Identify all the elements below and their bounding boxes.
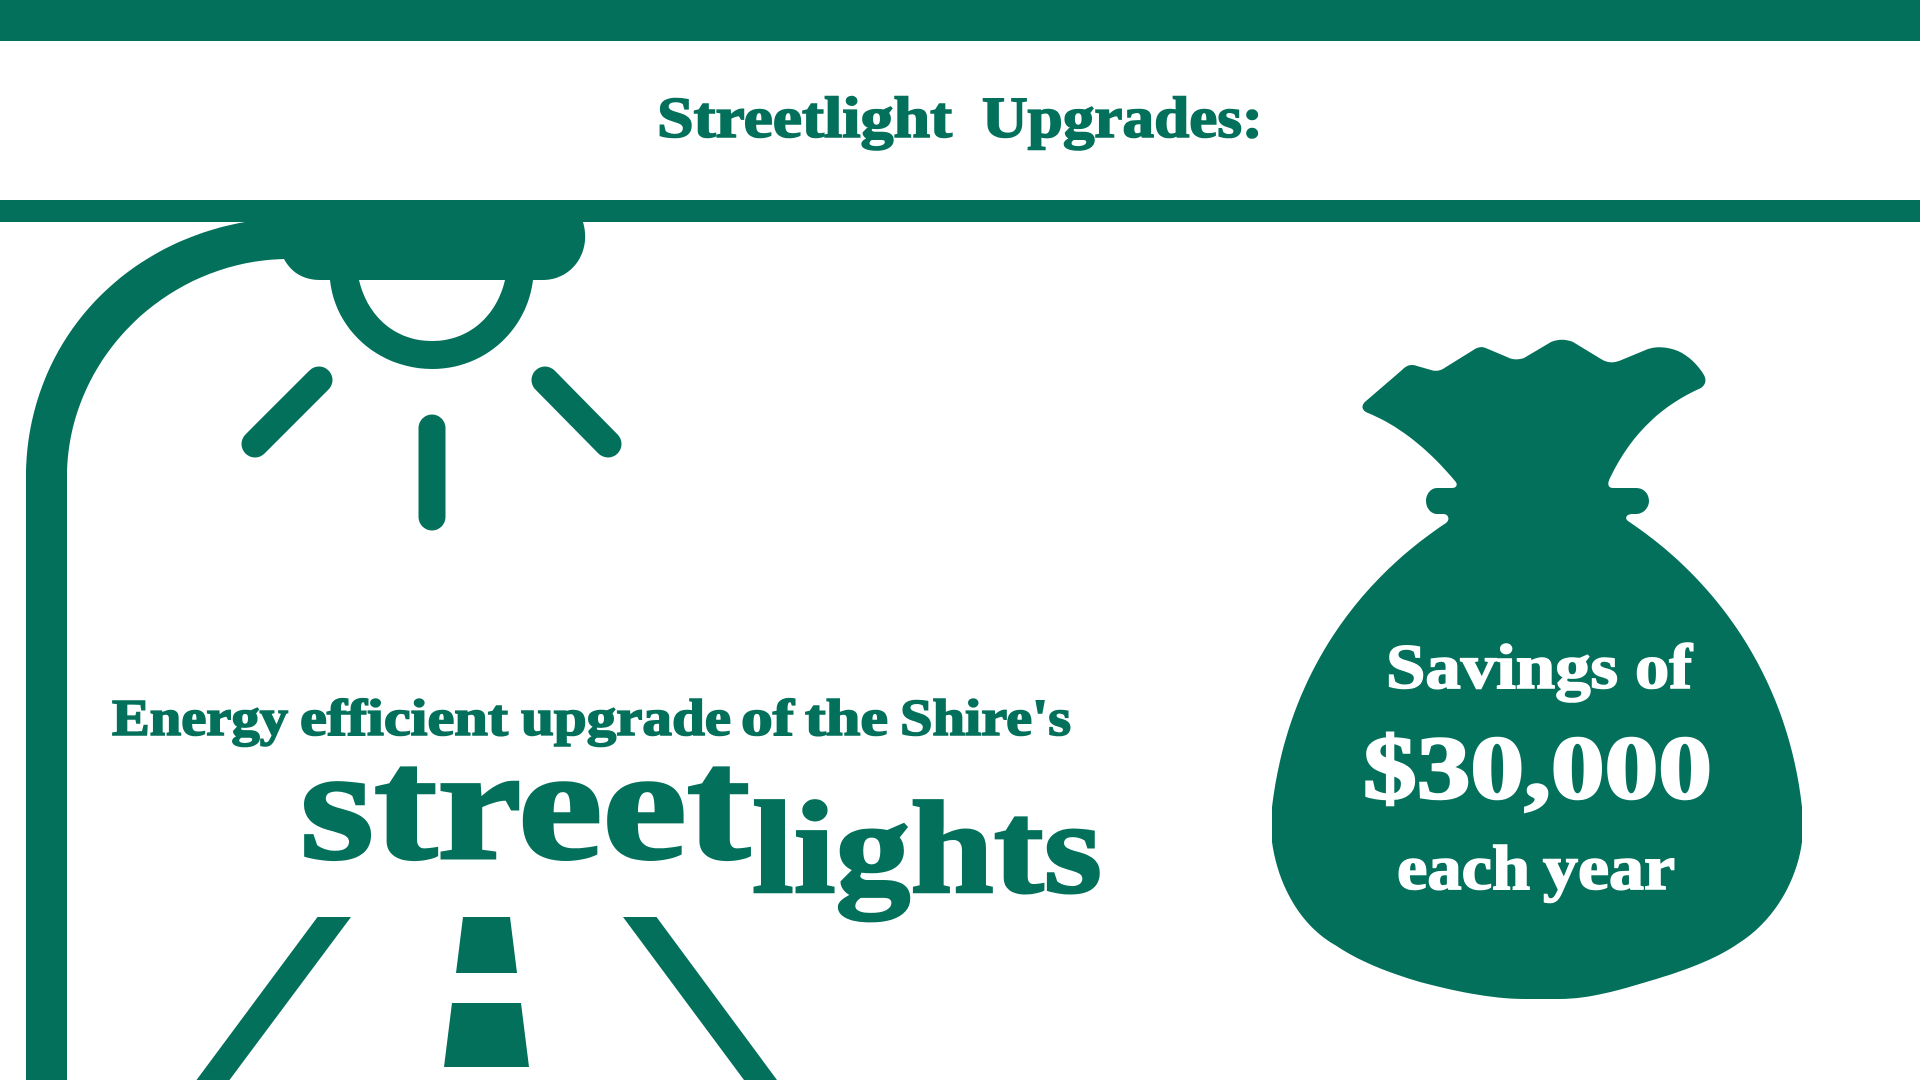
text: energy efficient upgrade (112, 690, 1071, 747)
text: each year: year (1543, 832, 1675, 903)
light rays (255, 380, 608, 517)
lamp post and head (26, 222, 585, 1080)
road centre dash upper (456, 917, 517, 973)
icon: street lamp (26, 222, 608, 1080)
road centre dash lower (444, 1003, 529, 1067)
icon: money bag (1272, 340, 1802, 999)
text: energy efficient upgrade: the (805, 690, 888, 747)
text: energy efficient upgrade: Energy (112, 690, 288, 747)
text: energy efficient upgrade: of (741, 690, 795, 747)
text: savings amount: $30,000 (1363, 719, 1712, 818)
title: Streetlight (657, 85, 953, 150)
title: Upgrades: (982, 85, 1263, 150)
top band (0, 0, 1920, 41)
header rule band (0, 200, 1920, 222)
text: energy efficient upgrade: efficient (300, 690, 509, 747)
text: energy efficient upgrade: upgrade (521, 690, 731, 747)
text: each year: each (1397, 832, 1530, 903)
road left edge (196, 917, 351, 1080)
title (657, 85, 1263, 150)
text: savings of: of (1635, 631, 1693, 702)
text: street: street (300, 715, 750, 893)
text: savings of (1386, 631, 1693, 702)
text: each year (1397, 832, 1675, 903)
text: lights: lights (752, 774, 1102, 921)
text: savings of: Savings (1386, 631, 1618, 702)
road right edge (623, 917, 777, 1080)
panel: money bag with savings (1272, 340, 1802, 999)
text: energy efficient upgrade: Shire's (900, 690, 1071, 747)
icon: road (196, 917, 777, 1080)
